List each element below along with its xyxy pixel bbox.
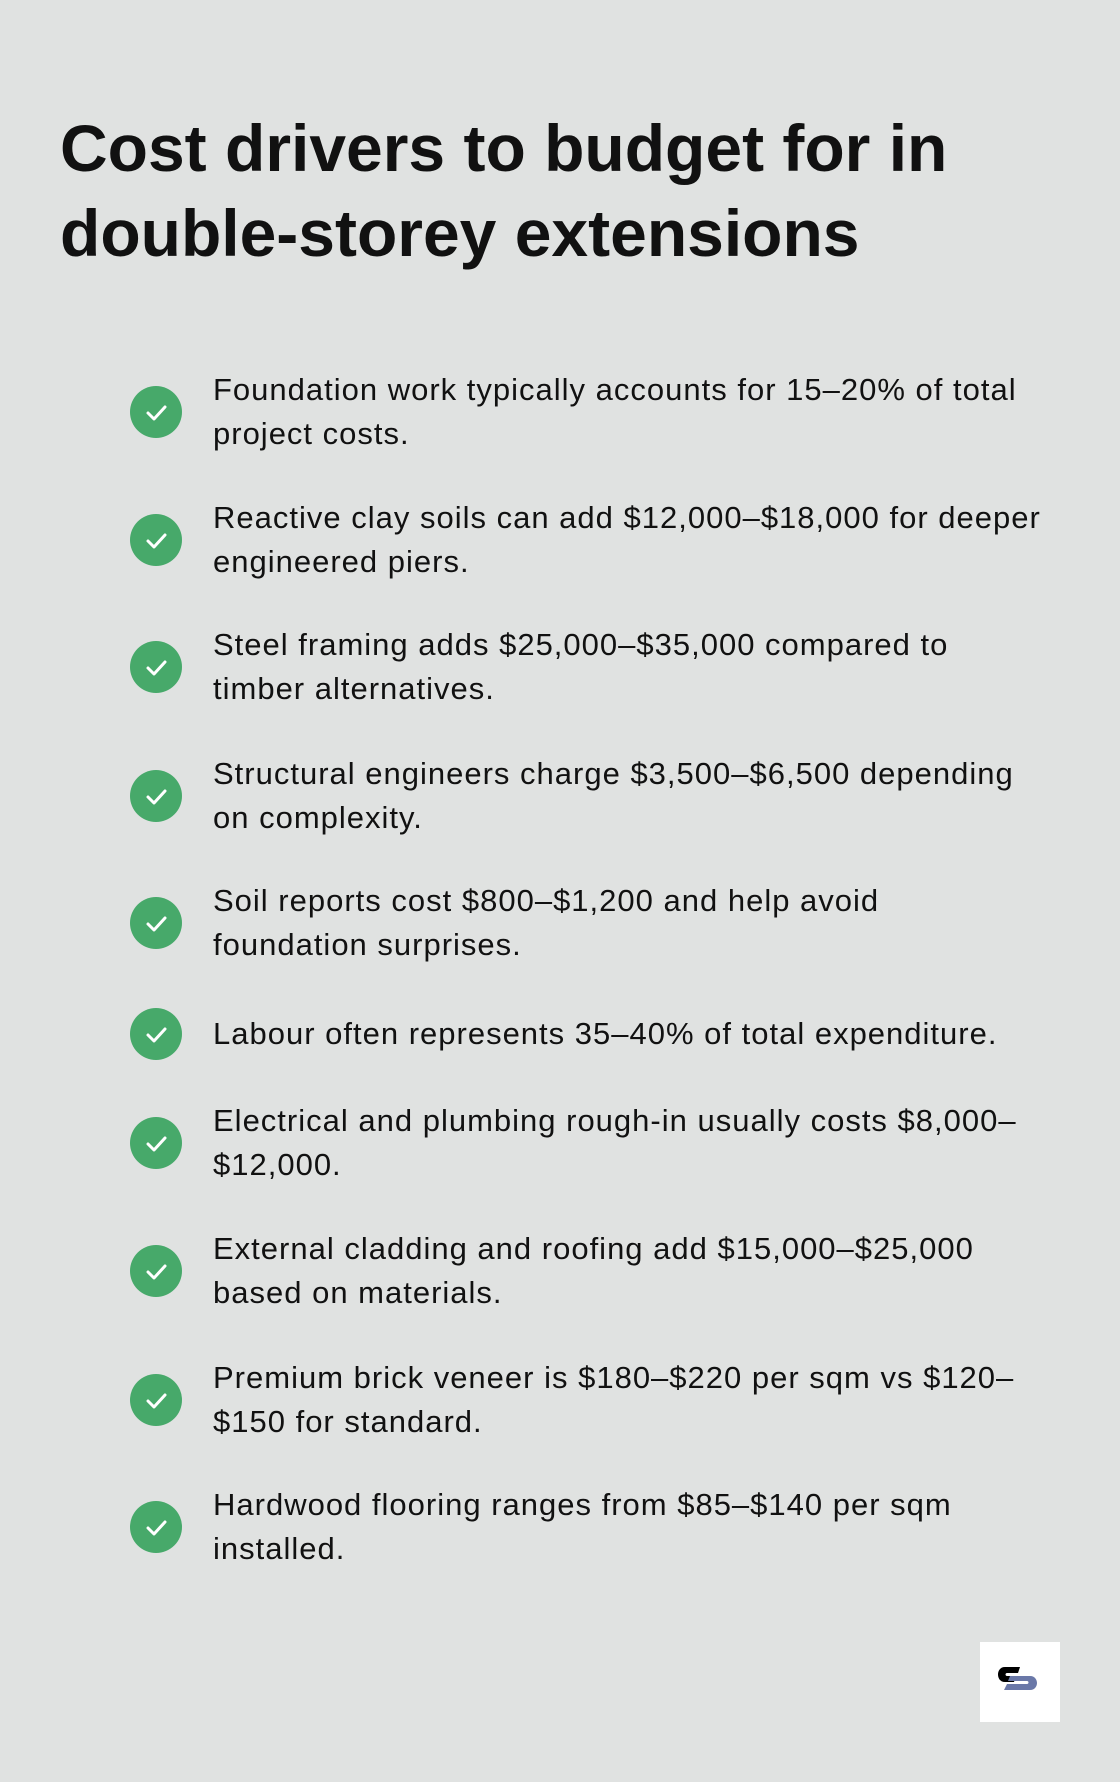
checklist: foundation surprises. [213, 927, 522, 962]
checklist: External cladding and roofing add $15,000–$25,000 [213, 1231, 974, 1266]
item 4 [130, 756, 1014, 835]
item 1 [130, 372, 1017, 451]
item 5 [130, 883, 879, 962]
checklist: project costs. [213, 416, 410, 451]
checklist: $150 for standard. [213, 1404, 483, 1439]
checklist: Reactive clay soils can add $12,000–$18,000 for deeper [213, 500, 1041, 535]
checklist: timber alternatives. [213, 671, 495, 706]
item 2 [130, 500, 1041, 579]
checklist: Structural engineers charge $3,500–$6,500 depending [213, 756, 1014, 791]
checklist [130, 372, 1041, 1566]
checklist: installed. [213, 1531, 345, 1566]
title: double-storey extensions [60, 196, 860, 270]
item 9 [130, 1360, 1014, 1439]
checklist: Soil reports cost $800–$1,200 and help avoid [213, 883, 879, 918]
item 8 [130, 1231, 974, 1310]
item 6 [130, 1008, 997, 1060]
item 7 [130, 1103, 1017, 1182]
checklist: Labour often represents 35–40% of total expenditure. [213, 1016, 997, 1051]
title: Cost drivers to budget for in [60, 111, 947, 185]
item 3 [130, 627, 948, 706]
checklist: Premium brick veneer is $180–$220 per sqm vs $120– [213, 1360, 1014, 1395]
item 10 [130, 1487, 952, 1566]
title [60, 111, 947, 270]
checklist: on complexity. [213, 800, 423, 835]
checklist: $12,000. [213, 1147, 342, 1182]
checklist: based on materials. [213, 1275, 503, 1310]
logo [980, 1642, 1060, 1722]
checklist: Steel framing adds $25,000–$35,000 compared to [213, 627, 948, 662]
checklist: engineered piers. [213, 544, 470, 579]
checklist: Foundation work typically accounts for 15–20% of total [213, 372, 1017, 407]
checklist: Hardwood flooring ranges from $85–$140 per sqm [213, 1487, 952, 1522]
checklist: Electrical and plumbing rough-in usually costs $8,000– [213, 1103, 1017, 1138]
